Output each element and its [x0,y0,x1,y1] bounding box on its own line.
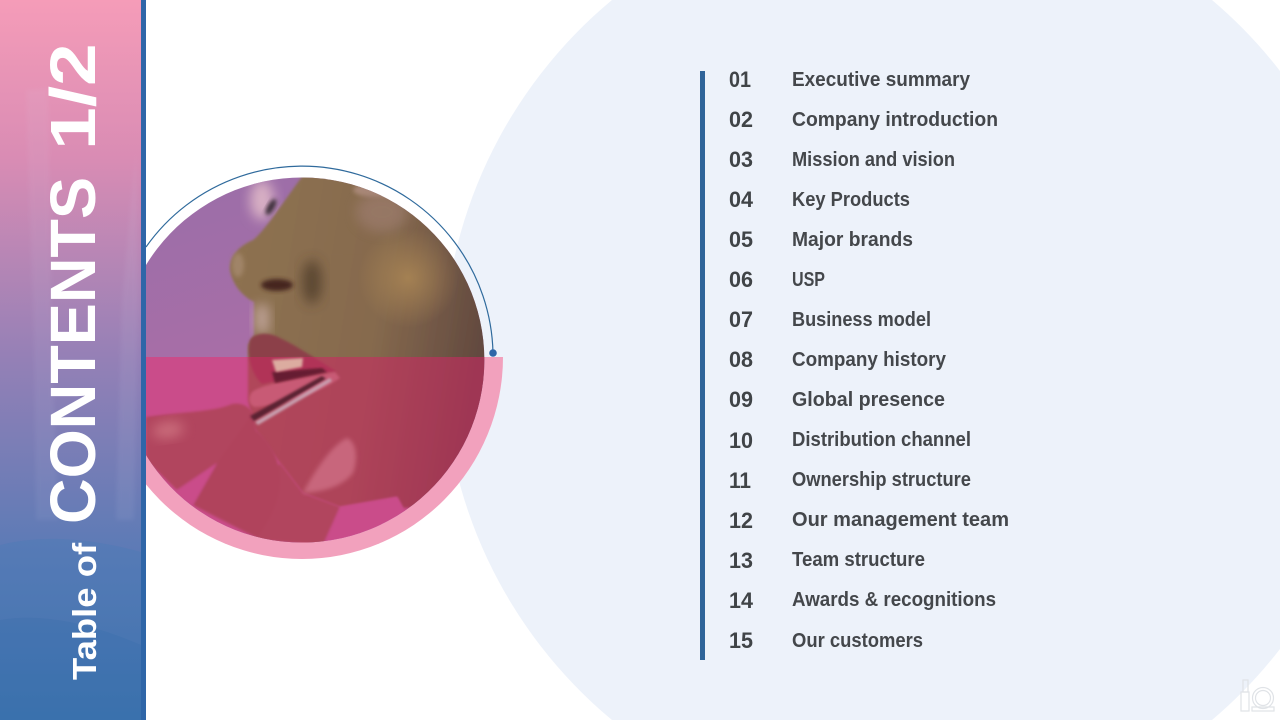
photo: lips and hand in circle [146,170,500,548]
cheek highlight [372,239,450,318]
item 06: USP [792,269,825,291]
item 01: Executive summary [792,69,971,91]
item 01 [729,67,971,92]
item 11: 11 [729,468,751,493]
item 15 [729,628,923,653]
face [230,170,500,508]
blue arc with dot [146,166,497,357]
item 15: 15 [729,628,753,653]
pink gap at chin [340,496,404,508]
item 13 [729,548,925,573]
lip brush [250,376,326,421]
eye [263,197,279,217]
item 03: 03 [729,147,753,172]
item 03: Mission and vision [792,149,955,171]
item 15: Our customers [792,630,923,652]
item 14: Awards & recognitions [792,589,996,611]
pink half ring [146,357,503,559]
item 10: 10 [729,428,753,453]
lower hand group [146,404,415,548]
item 12: 12 [729,508,753,533]
temple tone [356,192,408,232]
item 03 [729,147,955,172]
item 12: Our management team [792,509,1009,531]
finger one highlight [151,420,185,440]
item 07: Business model [792,309,931,331]
background circle [443,0,1280,720]
pink overlay on lower half [146,357,486,547]
item 02: Company introduction [792,109,998,131]
item 12 [729,508,1009,533]
mouth [272,368,327,383]
title line: Table of: Table of [68,542,104,680]
nail finger [303,438,356,493]
title: Table of CONTENTS 1/2 [37,43,109,680]
panel: left title bar [0,0,146,720]
item 01: 01 [729,67,751,92]
vertical list rule [700,71,705,660]
hand: finger one [146,404,253,490]
item 09 [729,387,945,412]
eye blur [250,180,274,220]
item 02: 02 [729,107,753,132]
brushes and hand backdrop [0,88,141,720]
nostril [261,279,293,291]
item 06: 06 [729,267,753,292]
lighter backdrop behind lower half [146,357,406,534]
upper eyelid [352,186,383,198]
item 09: Global presence [792,389,945,411]
item 05 [729,227,913,252]
item 08 [729,347,947,372]
arc end dot [489,349,497,357]
lower lip [249,372,340,407]
item 07: 07 [729,307,753,332]
item 14: 14 [729,588,754,613]
item 05: 05 [729,227,753,252]
item 13: 13 [729,548,753,573]
item 08: 08 [729,347,753,372]
lower finger [257,463,340,545]
item 07 [729,307,931,332]
item 06 [729,267,825,292]
lip crease highlight [255,305,269,333]
item 02 [729,107,998,132]
item 10: Distribution channel [792,429,971,451]
contents list [729,67,1009,653]
item 10 [729,428,971,453]
item 09: 09 [729,387,753,412]
item 13: Team structure [792,549,925,571]
icon: lipstick and mirror watermark [1241,680,1274,711]
hand: finger two [193,413,280,538]
teeth [272,358,303,372]
item 04 [729,187,910,212]
nose tip highlight [232,253,244,277]
item 08: Company history [792,349,947,371]
item 04: 04 [729,187,754,212]
item 11 [729,468,971,493]
item 04: Key Products [792,189,910,211]
item 11: Ownership structure [792,469,971,491]
nose shadow [302,260,322,304]
item 14 [729,588,996,613]
title line: CONTENTS: CONTENTS [38,177,109,524]
title line: 1/2: 1/2 [37,43,109,150]
upper lip [249,334,337,384]
item 05: Major brands [792,229,913,251]
lip brush shine [255,378,332,425]
left pink gap [182,464,217,487]
